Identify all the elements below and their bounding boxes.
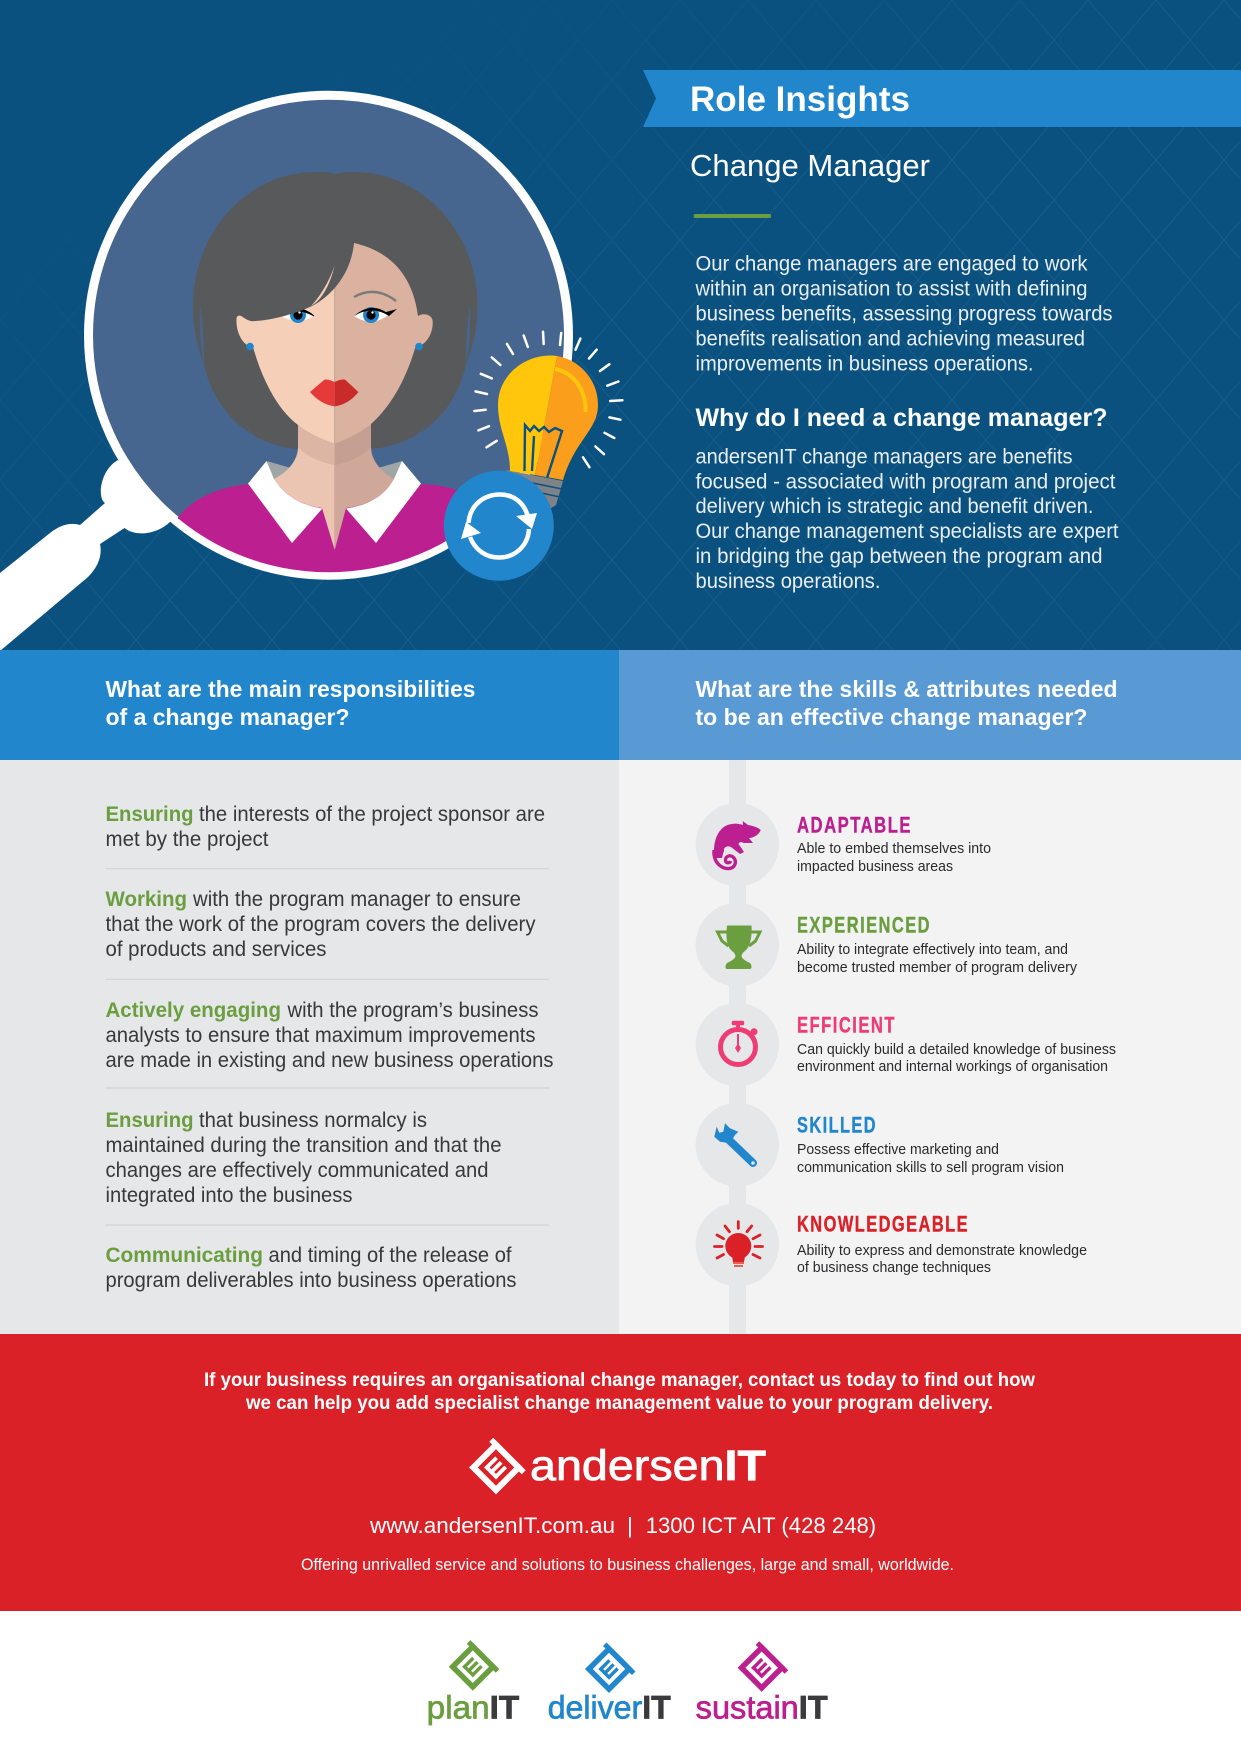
panel: skills heading band: to be an effective change manager?	[696, 704, 1088, 730]
logo: deliverIT	[548, 1642, 671, 1726]
contact details: 1300 ICT AIT (428 248)	[646, 1513, 876, 1538]
tagline: Offering unrivalled service and solutions to business challenges, large and small, worldwide.	[301, 1555, 954, 1574]
panel: responsibilities list	[0, 760, 619, 1334]
logo: deliverIT: deliverIT	[548, 1690, 671, 1726]
responsibility 2: that the work of the program covers the delivery	[106, 912, 536, 936]
skill description: communication skills to sell program vision	[797, 1160, 1064, 1176]
skill description: Can quickly build a detailed knowledge of business	[797, 1042, 1116, 1058]
icon: idea bulb	[714, 1222, 762, 1266]
responsibility 4	[106, 1108, 502, 1207]
logo: sustainIT	[696, 1641, 828, 1726]
responsibility 1	[106, 802, 545, 851]
skill: skilled	[696, 1103, 1064, 1186]
skill description: become trusted member of program delivery	[797, 960, 1078, 976]
contact details: www.andersenIT.com.au	[369, 1513, 615, 1538]
intro paragraph: business benefits, assessing progress towards	[696, 302, 1112, 326]
why paragraph: andersenIT change managers are benefits	[696, 444, 1072, 468]
responsibility 2	[106, 887, 536, 961]
responsibility 3: Actively engaging	[106, 998, 281, 1022]
intro paragraph: Our change managers are engaged to work	[696, 252, 1088, 276]
skill title: ADAPTABLE	[797, 813, 912, 838]
responsibility 2: of products and services	[106, 937, 326, 961]
why paragraph: Our change management specialists are expert	[696, 519, 1119, 543]
icon: light bulb	[474, 332, 622, 510]
icon: change arrows badge	[444, 471, 554, 581]
panel: skills list	[619, 760, 1241, 1334]
responsibility 2: with the program manager to ensure	[192, 887, 521, 911]
skill description	[797, 1142, 1064, 1176]
responsibility 3	[106, 998, 554, 1072]
intro paragraph: within an organisation to assist with defining	[695, 277, 1088, 301]
skill description	[797, 841, 991, 875]
responsibility 1: met by the project	[106, 827, 269, 851]
responsibility 4: maintained during the transition and that the	[106, 1133, 502, 1157]
responsibility 4: integrated into the business	[106, 1183, 352, 1207]
responsibility 4: Ensuring	[106, 1108, 194, 1132]
skill description: Able to embed themselves into	[797, 841, 991, 857]
title ribbon	[643, 70, 1241, 127]
responsibility 5	[106, 1243, 516, 1292]
skill description: Ability to express and demonstrate knowledge	[797, 1243, 1087, 1259]
skill description: Ability to integrate effectively into team, and	[797, 942, 1068, 958]
logo: sustainIT: sustainIT	[696, 1690, 828, 1726]
woman portrait	[170, 172, 480, 590]
skill description: environment and internal workings of organisation	[797, 1059, 1108, 1075]
panel: skills heading band: What are the skills & attributes needed	[696, 676, 1118, 702]
skill: efficient	[696, 1003, 1116, 1086]
icon: stopwatch	[720, 1021, 758, 1064]
responsibility 3: analysts to ensure that maximum improvements	[106, 1023, 536, 1047]
responsibility 5: Communicating	[106, 1243, 263, 1267]
green accent bar	[694, 214, 771, 218]
icon: trophy	[718, 926, 760, 969]
responsibility 3: with the program’s business	[287, 998, 538, 1022]
icon: wrench	[714, 1123, 755, 1165]
skill: adaptable	[696, 803, 991, 886]
intro paragraph: benefits realisation and achieving measured	[696, 327, 1085, 351]
heading: why do I need a change manager: Why do I need a change manager?	[696, 404, 1108, 432]
panel: brand logos	[0, 1611, 1241, 1754]
why paragraph	[696, 444, 1119, 593]
skill description	[797, 1042, 1116, 1075]
skill title: KNOWLEDGEABLE	[797, 1212, 969, 1237]
intro paragraph: improvements in business operations.	[696, 352, 1034, 376]
intro paragraph	[695, 252, 1112, 376]
panel: skills heading band	[619, 650, 1241, 760]
magnifier handle	[0, 460, 172, 651]
responsibility 5: and timing of the release of	[268, 1243, 512, 1267]
responsibility 4: changes are effectively communicated and	[106, 1158, 488, 1182]
why paragraph: business operations.	[696, 569, 880, 593]
responsibility 5: program deliverables into business operations	[106, 1268, 516, 1292]
skill title: SKILLED	[797, 1113, 877, 1138]
skill description: impacted business areas	[797, 859, 953, 875]
skill description: Possess effective marketing and	[797, 1142, 999, 1158]
skill description	[797, 1243, 1087, 1276]
responsibility 1: the interests of the project sponsor are	[199, 802, 545, 826]
skill description: of business change techniques	[797, 1260, 991, 1276]
panel: responsibilities heading band: What are the main responsibilities	[106, 676, 476, 702]
logo: planIT: planIT	[427, 1690, 520, 1726]
hero background	[0, 0, 1241, 650]
skill title: EFFICIENT	[797, 1013, 896, 1038]
skill: knowledgeable	[696, 1203, 1087, 1286]
panel: responsibilities heading band: of a change manager?	[106, 704, 350, 730]
skill: experienced	[696, 903, 1078, 986]
logo: andersenIT	[466, 1438, 766, 1497]
logo: andersenIT: andersen IT	[530, 1442, 766, 1490]
skill title: EXPERIENCED	[797, 913, 931, 938]
responsibility 1: Ensuring	[106, 802, 194, 826]
contact details	[369, 1513, 876, 1538]
responsibility 2: Working	[106, 887, 187, 911]
call to action	[204, 1369, 1036, 1414]
contact details: |	[627, 1513, 633, 1538]
call to action: we can help you add specialist change management value to your program delivery.	[245, 1392, 993, 1414]
responsibility 3: are made in existing and new business operations	[106, 1048, 554, 1072]
panel: responsibilities heading band	[0, 650, 619, 760]
skill description	[797, 942, 1078, 976]
why paragraph: in bridging the gap between the program and	[696, 544, 1102, 568]
title: Role Insights	[690, 80, 910, 119]
subtitle: Change Manager	[690, 148, 930, 183]
icon: chameleon	[714, 821, 761, 869]
logo: planIT	[427, 1640, 520, 1726]
magnifier lens	[88, 95, 568, 575]
panel: contact footer	[0, 1334, 1241, 1611]
responsibility 4: that business normalcy is	[199, 1108, 427, 1132]
why paragraph: delivery which is strategic and benefit driven.	[696, 494, 1094, 518]
call to action: If your business requires an organisational change manager, contact us today to find out how	[204, 1369, 1036, 1391]
why paragraph: focused - associated with program and project	[696, 469, 1116, 493]
magnifying glass illustration	[0, 95, 568, 651]
